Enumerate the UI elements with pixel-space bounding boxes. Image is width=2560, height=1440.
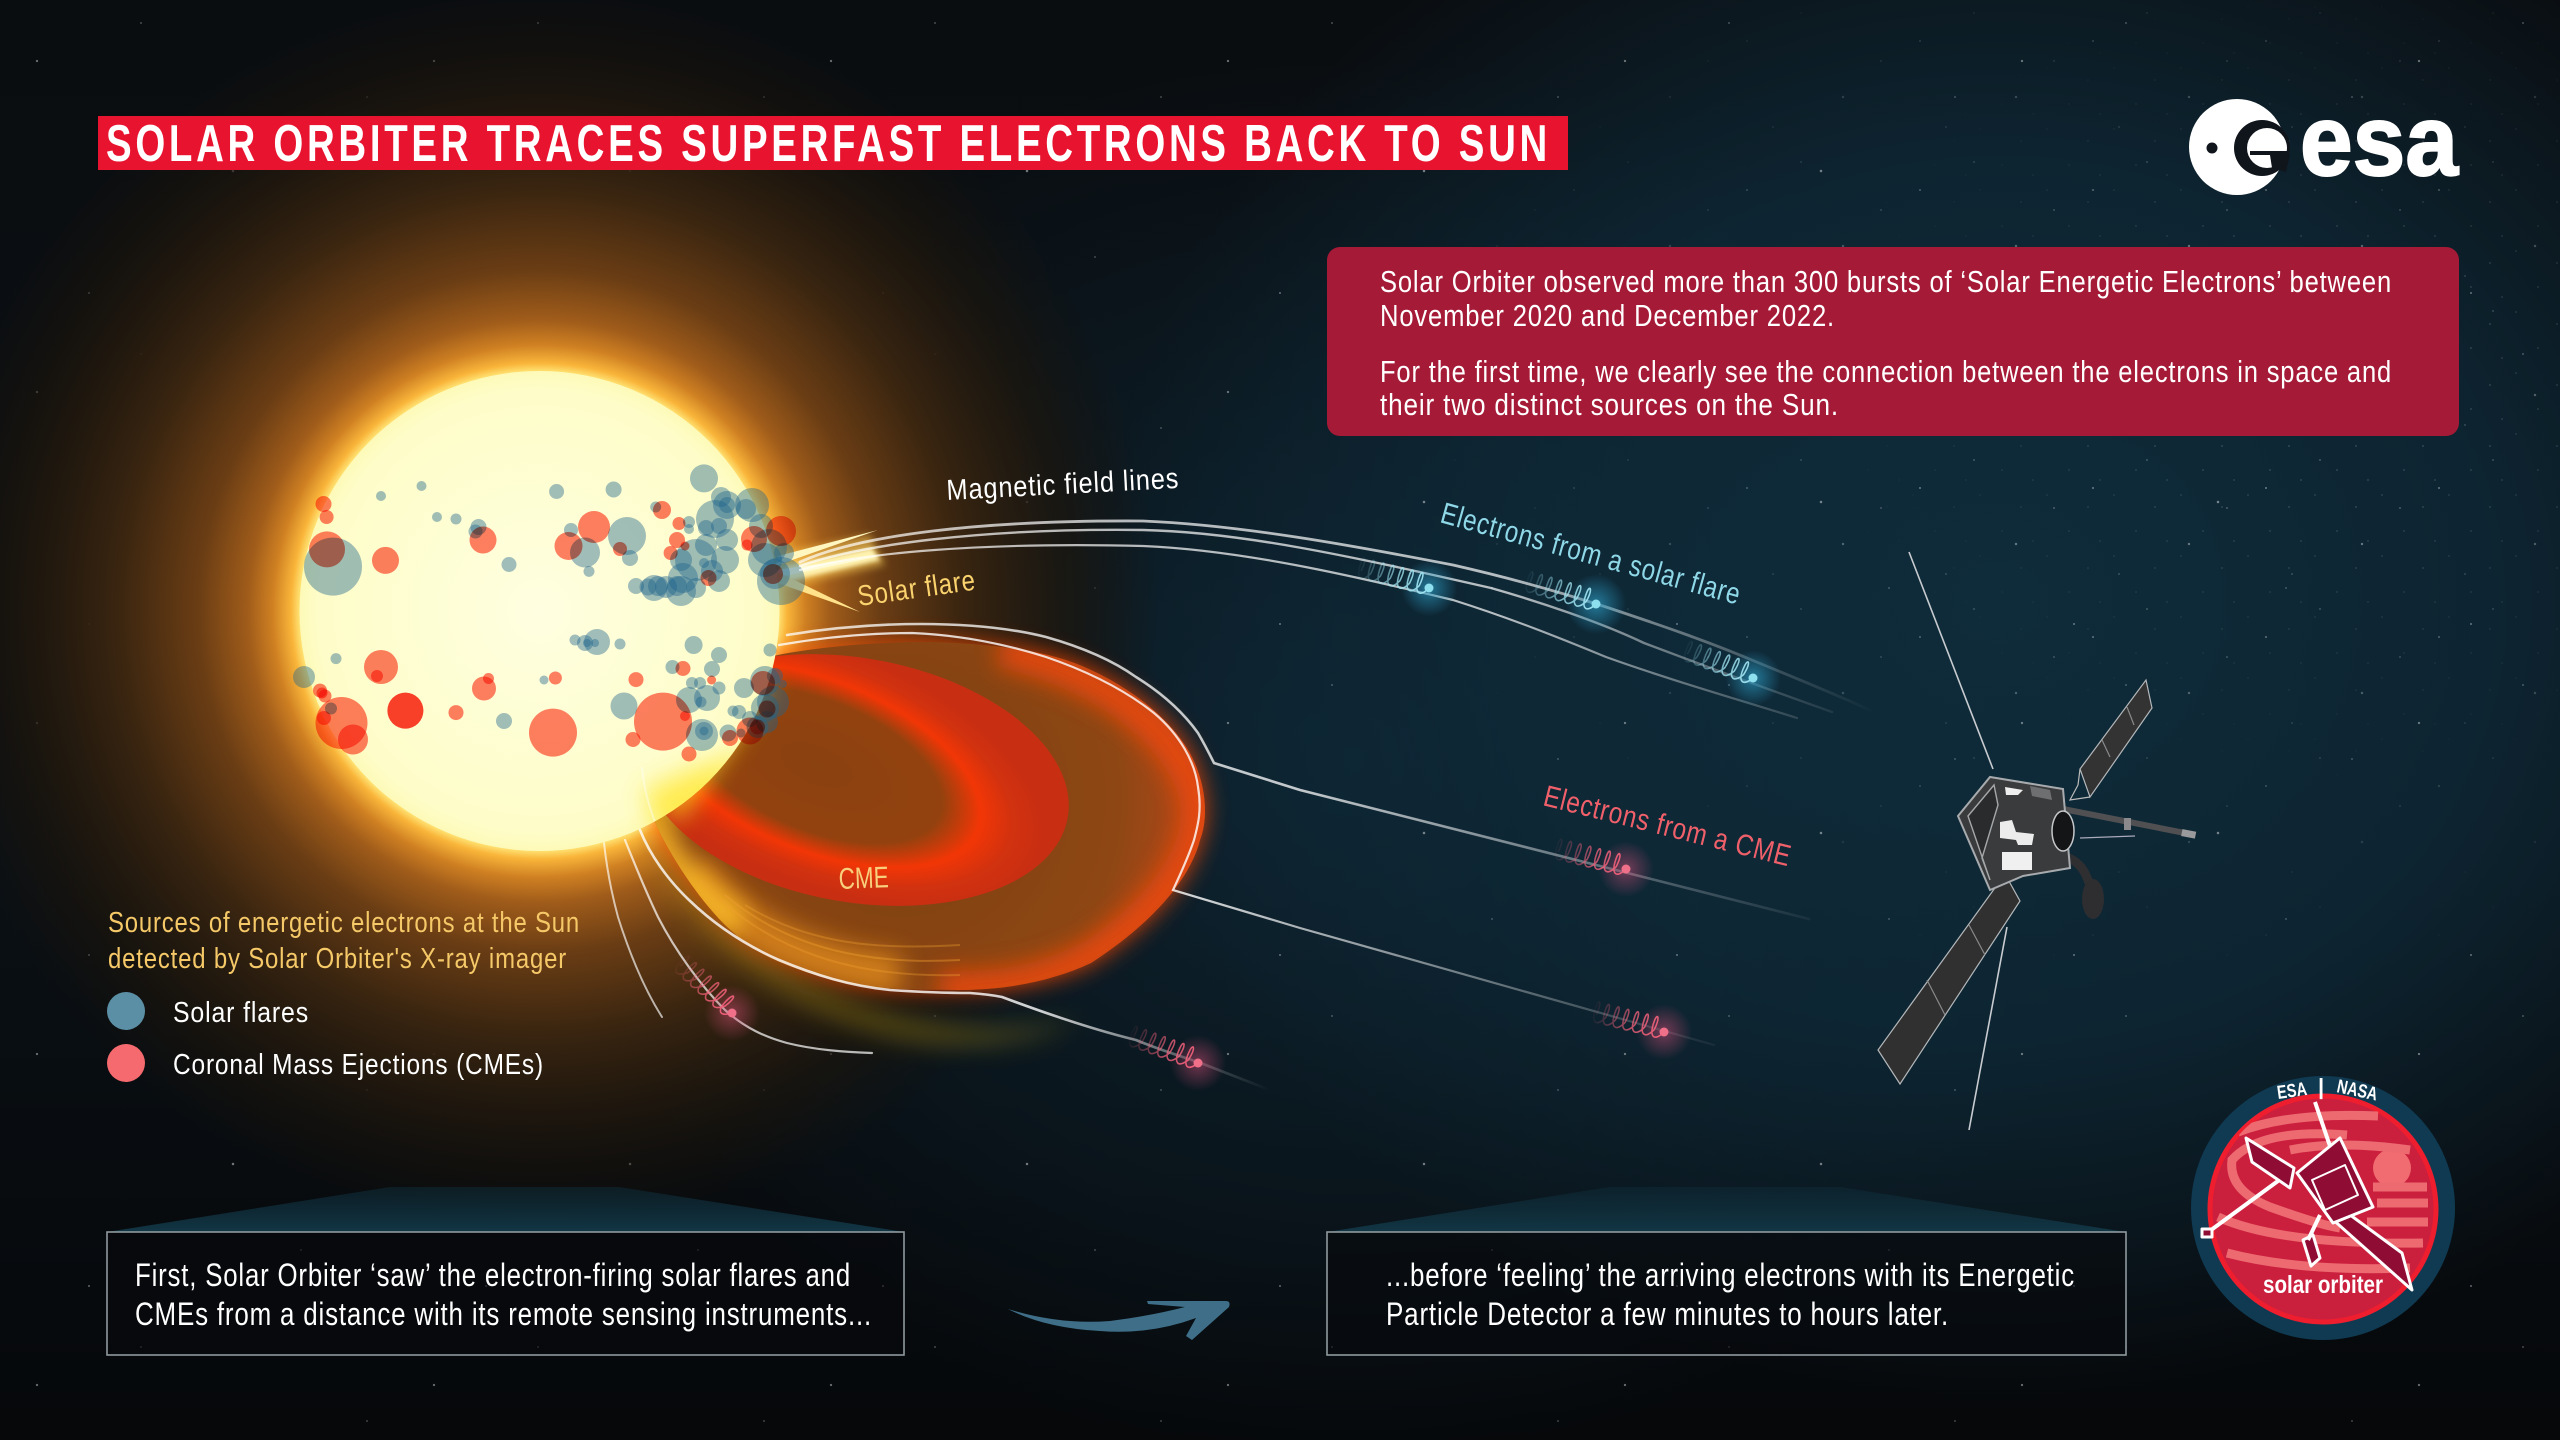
spacecraft: Solar Orbiter bbox=[1878, 552, 2196, 1130]
legend item: CMEs: Coronal Mass Ejections (CMEs) bbox=[173, 1049, 544, 1081]
text box: remote sensing: First, Solar Orbiter ‘saw’ the electron-firing solar flares and bbox=[135, 1257, 851, 1293]
solar flare burst bbox=[772, 530, 885, 612]
title: SOLAR ORBITER TRACES SUPERFAST ELECTRONS BACK TO SUN bbox=[106, 115, 1551, 173]
text box: remote sensing: CMEs from a distance with its remote sensing instruments... bbox=[135, 1296, 872, 1332]
text box: remote sensing bbox=[107, 1187, 904, 1355]
ESA logo bbox=[2189, 85, 2459, 197]
label: electrons from a CME: Electrons from a CME bbox=[1540, 780, 1795, 873]
legend heading: detected by Solar Orbiter's X-ray imager bbox=[108, 943, 567, 975]
legend bbox=[107, 907, 580, 1082]
label: solar flare: Solar flare bbox=[856, 565, 978, 613]
source markers on the sun bbox=[293, 464, 805, 762]
text box: in situ detection: ...before ‘feeling’ the arriving electrons with its Energetic bbox=[1386, 1257, 2075, 1293]
mission badge: solar orbiter bbox=[2263, 1271, 2383, 1299]
ESA logo: esa bbox=[2300, 85, 2459, 197]
magnetic field lines wrapping the CME bbox=[604, 624, 1809, 1090]
mission badge: | bbox=[2318, 1074, 2324, 1099]
legend heading bbox=[108, 907, 580, 975]
coronal mass ejection bbox=[621, 622, 1205, 1046]
text box: in situ detection bbox=[1327, 1187, 2126, 1355]
legend item: solar flares: Solar flares bbox=[173, 997, 309, 1029]
CME electrons bbox=[673, 839, 1692, 1091]
badge stripes and sun bbox=[2218, 1115, 2428, 1269]
cme glow through sun bbox=[642, 755, 745, 850]
label: electrons from a solar flare: Electrons from a solar flare bbox=[1437, 497, 1745, 612]
label: magnetic field lines: Magnetic field lines bbox=[946, 463, 1180, 507]
legend item: solar flares bbox=[107, 992, 309, 1030]
callout panel: main findings bbox=[1327, 247, 2459, 436]
callout panel: main findings: November 2020 and December 2022. bbox=[1380, 298, 1835, 333]
text box: in situ detection: Particle Detector a few minutes to hours later. bbox=[1386, 1296, 1949, 1332]
mission badge: NASA bbox=[2335, 1076, 2380, 1105]
badge spacecraft line art bbox=[2202, 1102, 2412, 1290]
legend heading: Sources of energetic electrons at the Sun bbox=[108, 907, 580, 939]
solar flare electrons bbox=[1357, 558, 1781, 706]
badge text: ESA bbox=[2276, 1079, 2309, 1104]
callout panel: main findings: their two distinct sources on the Sun. bbox=[1380, 387, 1839, 422]
sun glow bbox=[0, 0, 1159, 1231]
magnetic field lines from the solar flare bbox=[800, 521, 1874, 718]
label: CME: CME bbox=[838, 861, 889, 896]
sun bbox=[300, 371, 780, 851]
arrow bbox=[1008, 1301, 1230, 1340]
legend item: CMEs bbox=[107, 1044, 544, 1082]
mission badge bbox=[2191, 1074, 2455, 1340]
